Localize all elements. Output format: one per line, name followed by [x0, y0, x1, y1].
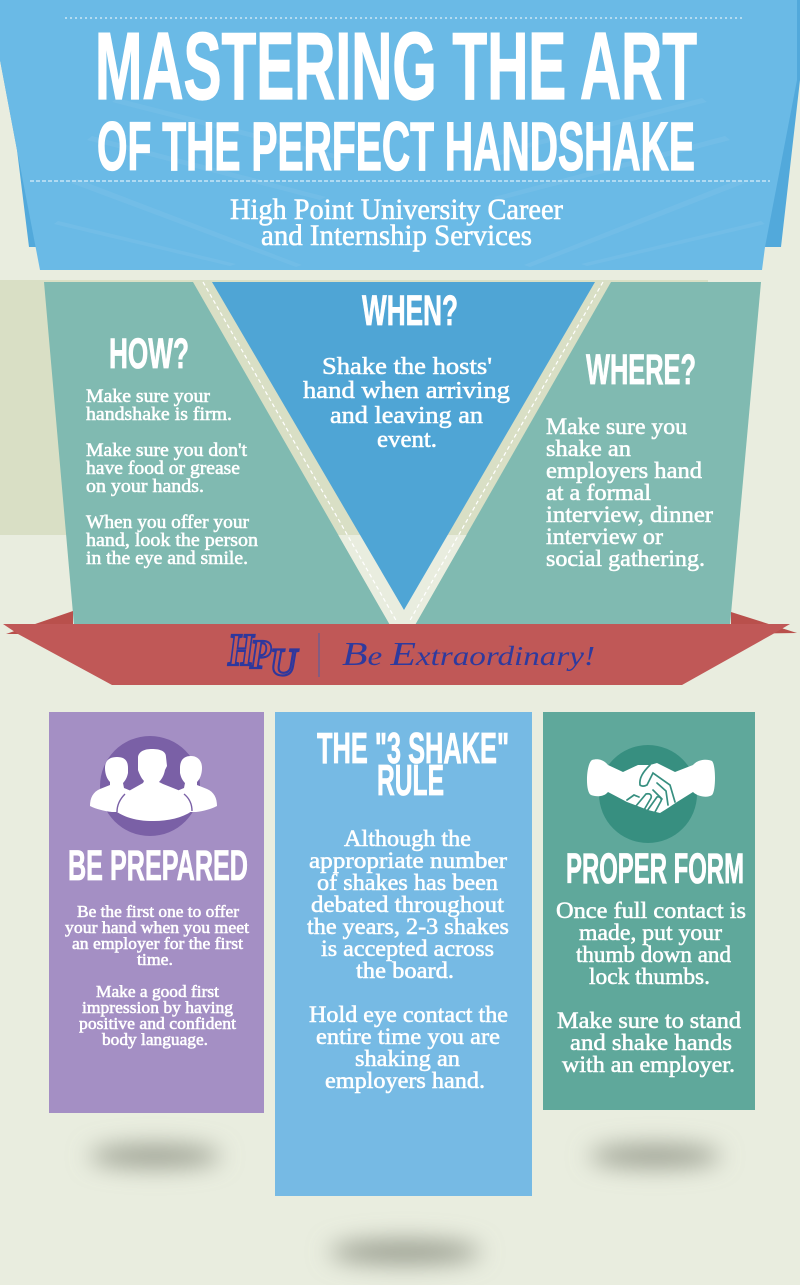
- logo: HPU: [227, 624, 299, 684]
- panel: how: HOW?: [109, 330, 189, 378]
- panel: be prepared: Be the first one to offer: [77, 902, 239, 921]
- panel: 3 shake rule: the years, 2-3 shakes: [307, 914, 509, 940]
- panel: 3 shake rule: is accepted across: [321, 936, 494, 962]
- panel: when: hand when arriving: [303, 377, 510, 404]
- panel: when: and leaving an: [330, 402, 483, 429]
- panel: where: Make sure you: [546, 414, 687, 440]
- panel: be prepared: BE PREPARED: [68, 842, 248, 890]
- panel: how where when: [44, 282, 761, 625]
- logo: HPU: U: [270, 641, 299, 684]
- header banner: [0, 0, 800, 270]
- panel: be prepared: your hand when you meet: [65, 918, 249, 937]
- panel: 3 shake rule: Hold eye contact the: [309, 1002, 508, 1028]
- ribbon: [3, 611, 797, 685]
- panel: 3 shake rule: [275, 712, 532, 1196]
- panel: 3 shake rule: debated throughout: [311, 892, 504, 918]
- panel: 3 shake rule: employers hand.: [325, 1068, 485, 1094]
- icon: handshake: [587, 759, 715, 813]
- icon: three people: [90, 749, 217, 821]
- panel: where: WHERE?: [586, 346, 696, 394]
- panel: proper form: made, put your: [579, 920, 722, 946]
- panel: where: [546, 346, 713, 572]
- subtitle: and Internship Services: [261, 219, 532, 252]
- panel: how: Make sure you don't: [86, 441, 248, 461]
- panel: proper form: thumb down and: [576, 942, 731, 968]
- panel: be prepared: time.: [137, 950, 173, 969]
- panel: how: Make sure your: [86, 387, 210, 407]
- panel: how: have food or grease: [86, 459, 240, 479]
- panel: how: in the eye and smile.: [86, 549, 248, 569]
- panel: 3 shake rule: THE "3 SHAKE": [317, 724, 509, 773]
- shadow: left card: [89, 1145, 221, 1167]
- panel: proper form: lock thumbs.: [589, 964, 710, 990]
- panel: 3 shake rule: RULE: [377, 756, 444, 805]
- panel: be prepared: Make a good first: [96, 982, 219, 1001]
- panel: be prepared: [49, 712, 264, 1113]
- panel: when: WHEN?: [362, 287, 458, 335]
- subtitle: High Point University Career: [230, 193, 563, 226]
- tagline: Be Extraordinary!: [342, 636, 595, 673]
- panel: proper form: [543, 712, 755, 1110]
- panel: where: social gathering.: [546, 546, 705, 572]
- panel: be prepared: impression by having: [82, 998, 234, 1017]
- panel: proper form: and shake hands: [570, 1030, 732, 1056]
- panel: where: employers hand: [546, 458, 702, 484]
- panel: 3 shake rule: shaking an: [355, 1046, 460, 1072]
- title: [95, 13, 697, 185]
- panel: 3 shake rule: Although the: [344, 826, 471, 852]
- panel: where: interview, dinner: [546, 502, 713, 528]
- panel: where: at a formal: [546, 480, 651, 506]
- panel: how: [86, 330, 258, 569]
- panel: proper form: Make sure to stand: [557, 1008, 741, 1034]
- subtitle: [230, 193, 563, 252]
- panel: 3 shake rule: of shakes has been: [317, 870, 498, 896]
- panel: where: interview or: [546, 524, 663, 550]
- panel: how: hand, look the person: [86, 531, 258, 551]
- panel: 3 shake rule: the board.: [356, 958, 454, 984]
- panel: when: event.: [377, 426, 437, 453]
- panel: how: When you offer your: [86, 513, 249, 533]
- logo: HPU: H: [227, 624, 255, 675]
- panel: be prepared: positive and confident: [79, 1014, 236, 1033]
- panel: when: Shake the hosts': [322, 353, 492, 380]
- panel: be prepared: an employer for the first: [72, 934, 243, 953]
- panel: how: handshake is firm.: [86, 405, 232, 425]
- shadow: middle card: [329, 1240, 481, 1264]
- panel: 3 shake rule: entire time you are: [316, 1024, 500, 1050]
- panel: where: shake an: [546, 436, 631, 462]
- panel: when: [303, 287, 510, 453]
- shadow: right card: [589, 1145, 721, 1167]
- panel: how: on your hands.: [86, 477, 204, 497]
- panel: proper form: Once full contact is: [556, 898, 746, 924]
- panel: proper form: with an employer.: [562, 1052, 735, 1078]
- panel: 3 shake rule: appropriate number: [309, 848, 507, 874]
- panel: be prepared: body language.: [102, 1030, 208, 1049]
- logo: HPU: P: [249, 631, 272, 677]
